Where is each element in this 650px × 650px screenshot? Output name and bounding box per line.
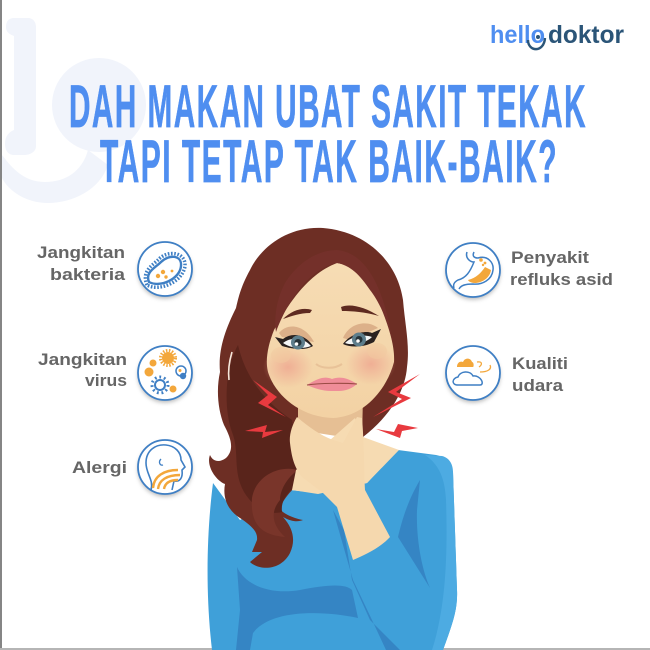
fringe hair	[275, 250, 392, 340]
neck	[298, 395, 363, 440]
logo: hellodoktor: doktor	[548, 21, 624, 49]
label: Jangkitan bakteria: bakteria	[50, 265, 126, 284]
icon: virus	[138, 346, 192, 400]
icon: head with airway	[138, 440, 192, 494]
label: Jangkitan bakteria	[37, 243, 126, 284]
label: Kualiti udara: udara	[512, 376, 564, 395]
eyebrows	[283, 309, 312, 319]
title	[69, 73, 587, 195]
logo: hellodoktor	[490, 21, 624, 49]
label: Penyakit refluks asid	[510, 248, 613, 289]
label: Jangkitan virus: Jangkitan	[38, 350, 127, 369]
sweater	[208, 450, 457, 650]
label: Jangkitan virus	[38, 350, 127, 390]
label: Penyakit refluks asid: refluks asid	[510, 270, 613, 289]
label: Jangkitan bakteria: Jangkitan	[37, 243, 125, 262]
face	[267, 263, 394, 418]
hair highlight strand	[229, 352, 232, 380]
cheeks	[263, 346, 313, 388]
watermark: stethoscope logo	[2, 18, 146, 203]
label: Alergi: Alergi	[72, 458, 127, 477]
label: Kualiti udara	[512, 354, 568, 395]
woman illustration	[208, 228, 457, 650]
hand and forearm	[290, 417, 390, 560]
icon: stomach	[446, 243, 500, 297]
lips	[307, 378, 357, 391]
eye shadow	[279, 327, 314, 342]
eyes	[275, 335, 313, 349]
icon: air quality	[446, 346, 500, 400]
label: Jangkitan virus: virus	[85, 371, 127, 390]
logo: hellodoktor: hello	[490, 21, 545, 49]
label: Penyakit refluks asid: Penyakit	[511, 248, 589, 267]
nose	[316, 364, 342, 368]
icon: bacteria	[138, 242, 192, 296]
label: Kualiti udara: Kualiti	[512, 354, 568, 373]
back hair	[209, 228, 408, 568]
pain bolts	[245, 374, 420, 438]
